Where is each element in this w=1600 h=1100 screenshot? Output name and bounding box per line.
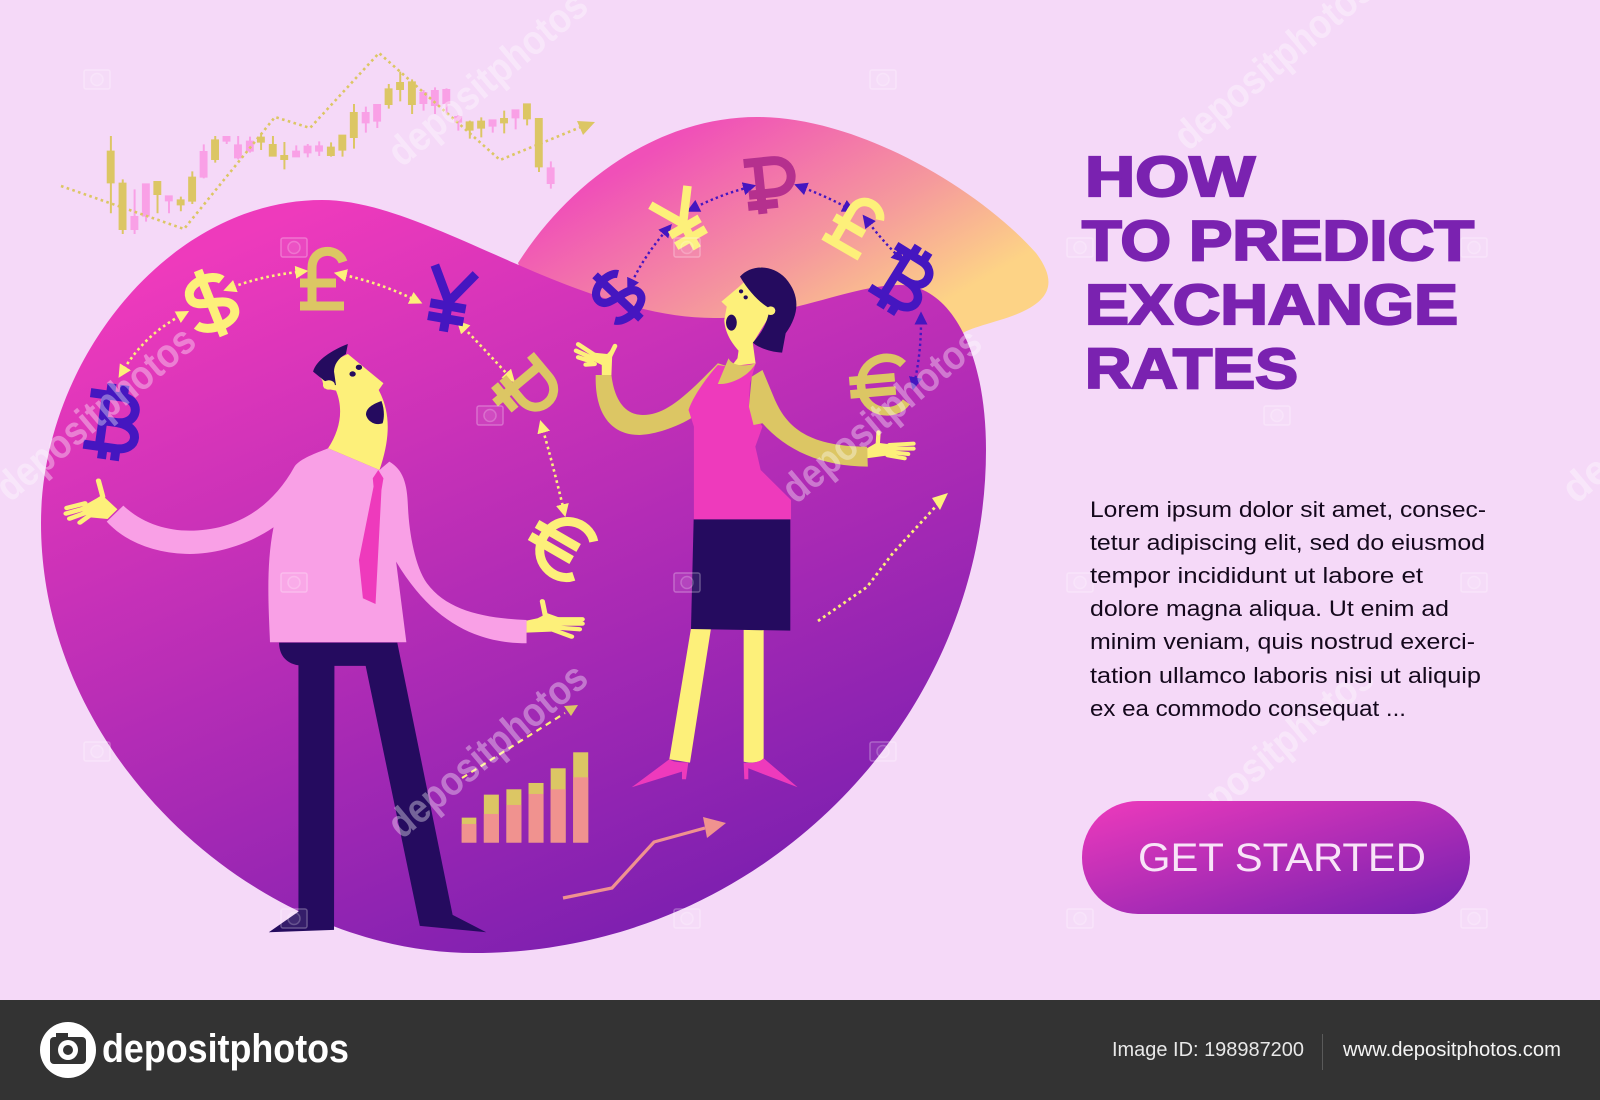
icon: euro yellow (man) xyxy=(519,506,598,583)
main gradient blob xyxy=(41,200,986,953)
man eyes xyxy=(349,365,362,377)
title: TO PREDICT xyxy=(1082,209,1474,273)
man hair xyxy=(313,344,348,385)
trend line arrow xyxy=(61,53,595,229)
icon: ruble gold (man) xyxy=(486,355,561,429)
woman shoes xyxy=(632,758,798,787)
body text block: tation ullamco laboris nisi ut aliquip xyxy=(1090,663,1481,688)
body text block: dolore magna aliqua. Ut enim ad xyxy=(1090,596,1449,621)
body text block: Lorem ipsum dolor sit amet, consec- xyxy=(1090,497,1486,522)
candlesticks xyxy=(107,72,555,234)
get started button: GET STARTED xyxy=(1138,836,1426,880)
icon: pound yellow (woman) xyxy=(824,191,886,257)
top gradient blob xyxy=(518,117,1048,400)
woman collar xyxy=(718,358,756,384)
get started button xyxy=(1082,801,1470,914)
candlestick chart xyxy=(61,53,595,234)
woman ear xyxy=(766,306,775,315)
dotted growth arrow xyxy=(818,493,948,621)
footer logo icon xyxy=(40,1022,96,1078)
icon: bitcoin blue (man) xyxy=(82,381,142,463)
woman head and neck xyxy=(721,267,773,370)
icon: yen blue (man) xyxy=(424,265,476,335)
woman right hand xyxy=(867,432,914,458)
man's currency arc arrows xyxy=(124,272,563,507)
body text block: minim veniam, quis nostrud exerci- xyxy=(1090,629,1475,654)
woman's currency arc arrows xyxy=(632,188,921,380)
man figure xyxy=(66,344,582,932)
woman eyes xyxy=(739,289,748,299)
icon: bitcoin blue (woman) xyxy=(864,236,942,322)
icon: dollar blue (woman) xyxy=(582,262,653,333)
woman right arm xyxy=(749,370,868,467)
footer bar xyxy=(0,1000,1600,1100)
watermark overlay: depositphotos xyxy=(772,319,990,512)
watermark camera marks xyxy=(84,70,1487,928)
watermark overlay: depositphotos xyxy=(378,654,596,847)
salmon growth arrow xyxy=(563,817,726,898)
body text block xyxy=(1090,497,1486,721)
man mouth xyxy=(366,401,384,424)
icon: dollar yellow (man) xyxy=(179,263,242,343)
title: EXCHANGE xyxy=(1085,273,1458,337)
footer logo wordmark: depositphotos xyxy=(102,1027,349,1071)
icon: pound gold (man) xyxy=(300,251,344,306)
man ear xyxy=(323,380,335,390)
dashed arrow above bars xyxy=(462,705,578,778)
woman legs xyxy=(632,519,798,787)
woman torso xyxy=(689,363,791,519)
icon: yen yellow (woman) xyxy=(650,184,717,258)
man left hand xyxy=(66,481,117,523)
icon: euro gold (woman) xyxy=(847,356,907,414)
title xyxy=(1082,145,1474,401)
woman mouth xyxy=(726,315,737,331)
man trousers and shoes xyxy=(269,643,486,932)
woman figure xyxy=(576,267,914,787)
icon: ruble purple (woman) xyxy=(744,159,795,215)
bar chart xyxy=(462,752,588,843)
man head xyxy=(314,354,388,470)
woman hair xyxy=(740,267,796,353)
title: HOW xyxy=(1085,145,1255,209)
body text block: ex ea commodo consequat ... xyxy=(1090,696,1406,721)
image id: Image ID: 198987200 xyxy=(1112,1039,1304,1061)
title: RATES xyxy=(1085,337,1298,401)
man right hand xyxy=(527,601,582,637)
website url: www.depositphotos.com xyxy=(1342,1039,1561,1061)
man shirt xyxy=(107,448,527,643)
woman left arm xyxy=(596,363,729,435)
watermark overlay xyxy=(0,0,1600,847)
man tie xyxy=(359,470,383,604)
woman skirt xyxy=(691,519,790,631)
woman left hand xyxy=(576,344,615,375)
body text block: tetur adipiscing elit, sed do eiusmod xyxy=(1090,530,1485,555)
body text block: tempor incididunt ut labore et xyxy=(1090,563,1423,588)
watermark overlay: depositphotos xyxy=(1164,654,1382,847)
